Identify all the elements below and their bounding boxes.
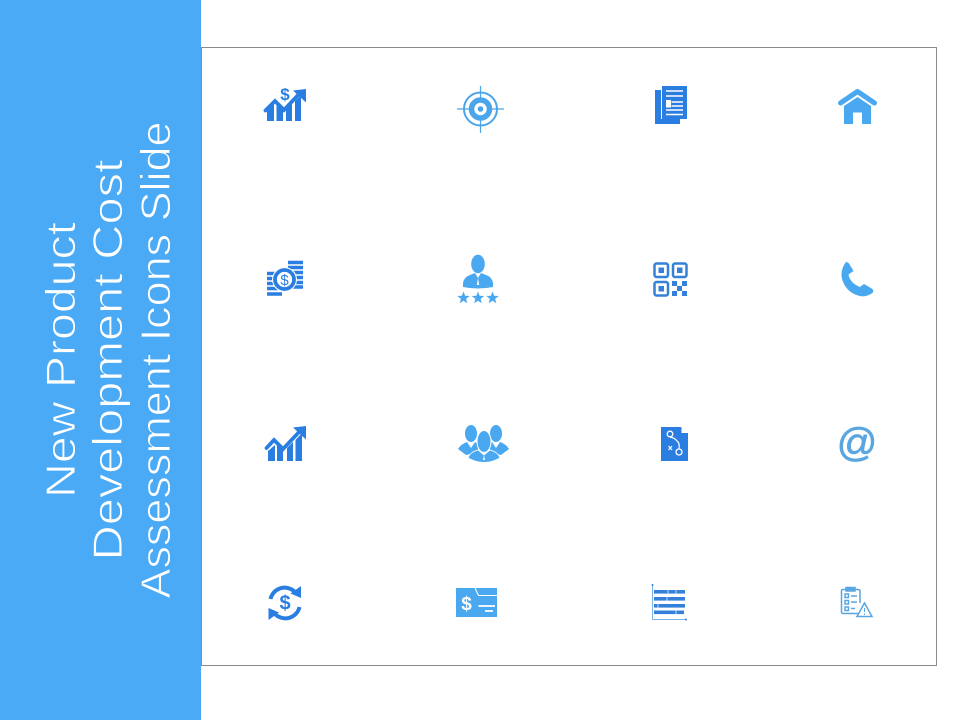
icon: rising bar chart: [266, 426, 306, 461]
icon: strategy document: [661, 427, 688, 461]
icon: coins with dollar: [267, 262, 303, 294]
icon: QR code: [654, 264, 687, 296]
panel: icon grid frame: [202, 48, 936, 666]
icon: house: [840, 92, 874, 124]
icon: horizontal bar table chart: [652, 584, 687, 620]
title: rotated slide heading: [37, 122, 179, 598]
title: rotated slide heading: Development Cost: [84, 159, 131, 560]
icon: checklist with warning triangle: [842, 588, 872, 616]
icon: growth chart with dollar: $: [280, 85, 290, 104]
icon: dollar exchange arrows: [268, 586, 301, 620]
icon: target: [457, 86, 504, 133]
icon: growth chart with dollar: [266, 85, 306, 121]
icon: dollar exchange arrows: $: [279, 592, 291, 614]
icon: team of three people: [458, 425, 509, 462]
icon: dollar bill card: $: [461, 594, 472, 615]
title: rotated slide heading: Assessment Icons Slide: [132, 122, 179, 598]
icon: coins with dollar: $: [280, 272, 289, 289]
title: rotated slide heading: New Product: [37, 222, 84, 498]
icon: dollar bill card: [456, 588, 497, 617]
icon: employee with three stars: [457, 255, 499, 303]
panel: blue title sidebar: [0, 0, 201, 720]
icon: newspaper: [655, 86, 687, 124]
icon: telephone: [842, 262, 873, 296]
icon: at sign: @: [837, 421, 877, 465]
